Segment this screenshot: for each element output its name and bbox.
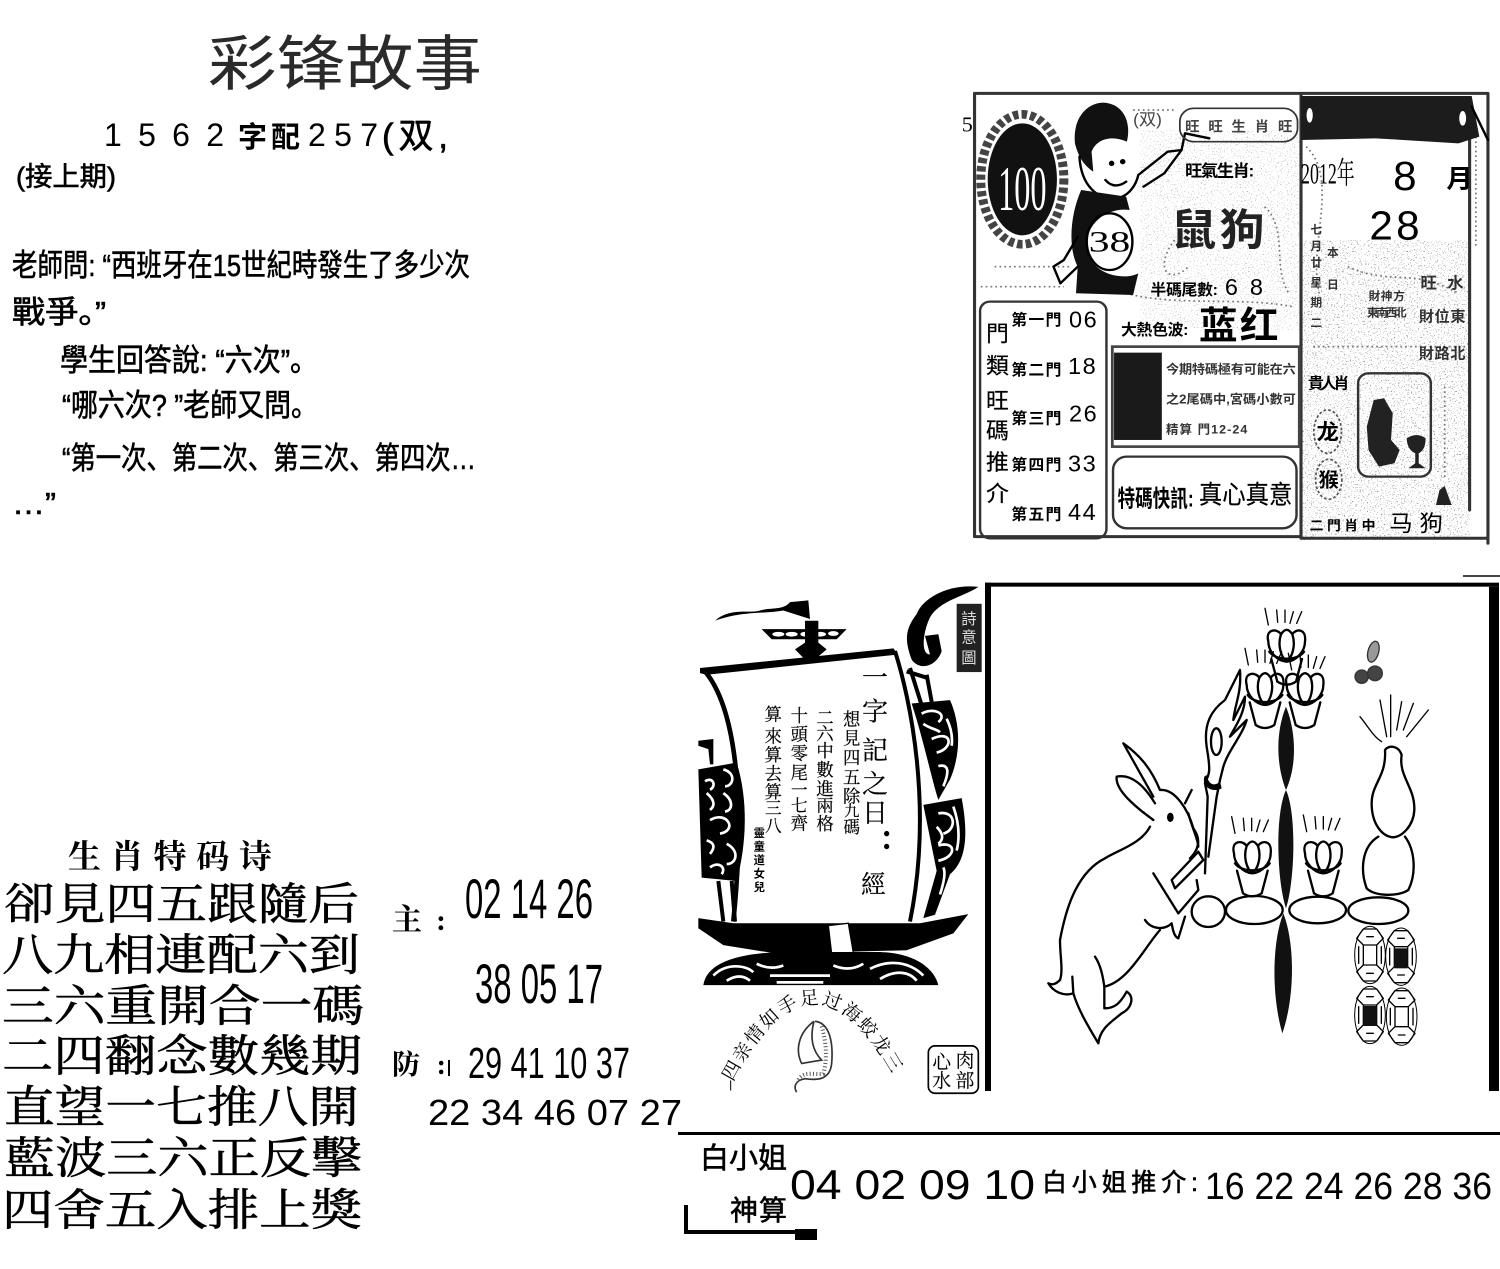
two doors zodiac bbox=[1310, 511, 1443, 537]
ship hull bbox=[698, 914, 968, 985]
bee bbox=[1355, 640, 1382, 683]
sail poem: 四 bbox=[843, 748, 860, 768]
noble people zodiac: 猴 bbox=[1319, 470, 1339, 492]
story text: …” bbox=[12, 486, 56, 521]
door numbers list: 門 bbox=[986, 322, 1009, 347]
door numbers list: 06 bbox=[1069, 307, 1097, 332]
calendar almanac notes: 期 bbox=[1310, 296, 1322, 310]
picture frame bbox=[985, 583, 1499, 1091]
story text: “哪六次? ”老師又問。 bbox=[62, 388, 318, 423]
calendar almanac notes: 財路北 bbox=[1419, 345, 1466, 362]
sail poem: 經 bbox=[861, 871, 886, 899]
footer: Miss Bai: 白小姐 bbox=[700, 1142, 787, 1175]
inner heart box: 水 bbox=[932, 1070, 951, 1092]
issue line: 1562 字配 257 bbox=[104, 117, 448, 156]
right banner ornaments bbox=[912, 700, 965, 918]
door numbers list: 第一門 bbox=[1011, 310, 1061, 329]
black notice box bbox=[1112, 347, 1299, 447]
colours blue red: 大熱色波: bbox=[1121, 320, 1188, 339]
issue line: 1562 字配 257: 257 bbox=[308, 117, 378, 153]
door numbers list: 18 bbox=[1068, 353, 1096, 379]
gourd bbox=[1360, 695, 1428, 895]
calendar almanac notes: 廿 bbox=[1310, 256, 1323, 270]
speckle: calendar column bbox=[1300, 240, 1470, 540]
black notice box: 精算 門12-24 bbox=[1166, 422, 1248, 436]
sail poem: 記 bbox=[862, 736, 888, 765]
story text: 戰爭。” bbox=[12, 295, 106, 330]
main numbers: 38 05 17 bbox=[475, 952, 603, 1015]
poem lines: 三六重開合一碼 bbox=[2, 982, 364, 1031]
special code hint: 特碼快訊: bbox=[1118, 486, 1194, 513]
door numbers list: 第四門 bbox=[1011, 455, 1061, 474]
calendar date bbox=[1301, 153, 1473, 248]
black notice box: 之2尾碼中,宮碼小數可 bbox=[1166, 392, 1296, 406]
calendar almanac notes: 旺水 bbox=[1420, 275, 1464, 292]
sail poem: 八 bbox=[765, 817, 782, 836]
top slogan speech bubble bbox=[1133, 108, 1298, 142]
main numbers: 主: bbox=[392, 904, 446, 937]
badge 100 bbox=[981, 114, 1064, 244]
poem tag: 詩 bbox=[961, 610, 977, 628]
footer recommendation bbox=[1042, 1166, 1492, 1208]
flower cups bbox=[1232, 608, 1342, 896]
main numbers bbox=[392, 867, 603, 1015]
door numbers list: 26 bbox=[1069, 401, 1097, 427]
noble people zodiac bbox=[1308, 375, 1349, 499]
noble people zodiac: 貴人肖 bbox=[1308, 375, 1349, 392]
door numbers list: 碼 bbox=[986, 419, 1009, 443]
inner heart box bbox=[928, 1046, 978, 1093]
speckle noise bbox=[981, 110, 1476, 480]
calendar almanac notes: 財位東 bbox=[1419, 308, 1466, 326]
sail poem: 格 bbox=[816, 814, 834, 834]
ship sail and mast bbox=[700, 600, 920, 922]
calendar almanac notes: 月 bbox=[1310, 240, 1322, 253]
story text: 學生回答說: “六次”。 bbox=[60, 343, 318, 378]
title: 彩锋故事 bbox=[208, 31, 482, 98]
sail poem: 六 bbox=[816, 724, 834, 744]
calendar almanac notes: 日 bbox=[1327, 279, 1339, 291]
special code hint: 真心真意 bbox=[1199, 481, 1292, 509]
snake medallion: 四亲情如手足过海蛟龙三六九 bbox=[720, 988, 903, 1081]
sail poem: 道 bbox=[754, 853, 766, 867]
poem lines: 藍波三六正反擊 bbox=[4, 1134, 362, 1183]
poem tag bbox=[957, 604, 982, 672]
sail poem: 進 bbox=[816, 779, 834, 799]
sail poem: 想 bbox=[843, 709, 861, 730]
two doors zodiac: 二門肖中 bbox=[1310, 517, 1375, 533]
door numbers list: 44 bbox=[1068, 499, 1096, 525]
top slogan speech bubble: 旺旺生肖旺 bbox=[1185, 119, 1292, 136]
top slogan speech bubble: (双) bbox=[1133, 110, 1162, 129]
rabbit bbox=[1048, 743, 1203, 1043]
four coins bbox=[1355, 926, 1417, 1045]
issue line: 1562 字配 257: 1562 bbox=[104, 117, 224, 153]
inner heart box: 部 bbox=[956, 1070, 975, 1092]
cartoon boy holding 38 ball: 38 bbox=[1089, 226, 1130, 259]
badge 100: 100 bbox=[998, 153, 1047, 224]
main numbers: 02 14 26 bbox=[465, 867, 593, 930]
poem lines: 直望一七推八開 bbox=[4, 1083, 359, 1132]
door numbers list: 類 bbox=[986, 354, 1009, 378]
calendar date: 28 bbox=[1369, 202, 1420, 248]
footer: Miss Bai: 神算 bbox=[730, 1195, 787, 1226]
poem tag: 圖 bbox=[961, 650, 977, 667]
sail poem: 五 bbox=[843, 767, 860, 787]
issue line: 1562 字配 257: 字配 bbox=[238, 121, 300, 154]
calendar almanac notes: 七 bbox=[1310, 224, 1323, 236]
sail poem: 去 bbox=[765, 764, 782, 784]
sail poem: 字 bbox=[862, 697, 888, 726]
snake medallion bbox=[720, 988, 903, 1092]
calendar almanac notes: 財神方 bbox=[1369, 289, 1405, 303]
sail poem: 靈 bbox=[754, 827, 765, 840]
tail numbers 68 bbox=[1150, 274, 1263, 300]
panel: lottery calendar clipping: 5 bbox=[962, 113, 973, 137]
calendar black banner bbox=[1301, 96, 1488, 143]
dragon figure at prow bbox=[907, 586, 978, 705]
thin rule top right bbox=[1463, 575, 1500, 577]
defence numbers: 防: bbox=[392, 1049, 446, 1081]
panel: ship poem bbox=[698, 586, 982, 1094]
colours blue red bbox=[1121, 306, 1279, 347]
black spindle stem bbox=[1274, 707, 1294, 1033]
special code hint bbox=[1113, 457, 1297, 528]
panel: zodiac poem bbox=[2, 839, 364, 1235]
panel: lottery calendar clipping bbox=[962, 93, 1488, 543]
sail poem: 女 bbox=[754, 867, 765, 881]
story text bbox=[12, 248, 476, 521]
base clouds bbox=[1192, 896, 1408, 927]
calendar date: 月 bbox=[1446, 166, 1473, 193]
door numbers list: 第三門 bbox=[1011, 409, 1061, 427]
sail poem: 七 bbox=[791, 797, 808, 816]
door numbers list: 第五門 bbox=[1011, 505, 1061, 523]
tail numbers 68: 半碼尾數: bbox=[1150, 281, 1218, 299]
sail poem: 二 bbox=[816, 708, 834, 728]
poem lines bbox=[2, 880, 364, 1235]
footer numbers: 04 02 09 10 bbox=[790, 1161, 1035, 1208]
colours blue red: 蓝红 bbox=[1199, 306, 1279, 347]
zodiac picks: 鼠狗 bbox=[1171, 207, 1265, 255]
issue line: 1562 字配 257: (双, bbox=[382, 117, 448, 156]
cartoon boy holding 38 ball bbox=[1053, 103, 1209, 295]
sail poem: 數 bbox=[816, 760, 834, 780]
sail poem: 算 bbox=[765, 745, 782, 765]
sail poem: 齊 bbox=[791, 813, 808, 834]
sail poem: 兒 bbox=[754, 880, 766, 894]
story text: 老師問: “西班牙在15世紀時發生了多少次 bbox=[12, 248, 470, 283]
defence numbers bbox=[392, 1039, 682, 1133]
door numbers list: 旺 bbox=[986, 389, 1009, 413]
door numbers list bbox=[980, 302, 1106, 538]
poem lines: 卻見四五跟隨后 bbox=[4, 880, 359, 929]
poem tag: 意 bbox=[961, 628, 977, 647]
sail poem: 日 bbox=[862, 799, 888, 828]
zodiac picks bbox=[1171, 162, 1265, 255]
speckle: clipping centre bbox=[1140, 130, 1300, 330]
calendar almanac notes: 東南西北 bbox=[1367, 306, 1407, 320]
door numbers list: 第二門 bbox=[1011, 360, 1061, 379]
hand holding branch bbox=[1204, 670, 1247, 873]
calendar almanac notes bbox=[1310, 224, 1466, 362]
sail poem: 一 bbox=[791, 781, 808, 800]
calendar date: 8 bbox=[1393, 153, 1417, 199]
zodiac picks: 旺氣生肖: bbox=[1185, 162, 1254, 181]
sail poem: 十 bbox=[791, 706, 808, 726]
sail poem: 除 bbox=[843, 786, 861, 807]
noble people zodiac: 龙 bbox=[1317, 420, 1339, 444]
black notice box: 今期特碼極有可能在六 bbox=[1166, 362, 1296, 376]
poem lines: 二四翻念數幾期 bbox=[2, 1032, 362, 1081]
footer recommendation: 白小姐推介: bbox=[1042, 1169, 1198, 1197]
sail poem: 算 bbox=[765, 704, 782, 724]
clipping frame bbox=[975, 93, 1488, 543]
two doors zodiac: 马狗 bbox=[1389, 511, 1443, 537]
sail poem bbox=[754, 663, 889, 899]
sail poem: 中 bbox=[816, 741, 834, 761]
calendar almanac notes: 本 bbox=[1327, 246, 1339, 260]
door numbers list: 推 bbox=[986, 450, 1009, 475]
continued note: (接上期) bbox=[16, 162, 116, 192]
door numbers list: 介 bbox=[986, 482, 1009, 507]
story text: “第一次、第二次、第三次、第四次… bbox=[62, 441, 476, 476]
poem lines: 四舍五入排上獎 bbox=[2, 1186, 362, 1235]
poem heading: 生肖特码诗 bbox=[68, 839, 272, 876]
door numbers list: 33 bbox=[1068, 451, 1096, 477]
sail poem: 尾 bbox=[791, 763, 808, 783]
calendar date: 2012年 bbox=[1301, 157, 1355, 190]
sail poem: 之 bbox=[862, 770, 888, 799]
sail poem: 一 bbox=[862, 663, 888, 693]
sail poem: 來 bbox=[765, 726, 782, 746]
sail poem: 零 bbox=[791, 743, 808, 763]
rule above footer bbox=[678, 1132, 1500, 1135]
sail poem: 三 bbox=[765, 799, 782, 818]
sail poem: 童 bbox=[754, 839, 765, 854]
sail poem: 見 bbox=[843, 729, 860, 749]
tail numbers 68: 68 bbox=[1225, 274, 1263, 300]
left banner ornaments bbox=[698, 739, 745, 922]
rooster and cup picture bbox=[1358, 373, 1452, 505]
defence numbers: 29 41 10 37 bbox=[468, 1039, 630, 1088]
panel: rabbit puzzle picture bbox=[985, 583, 1499, 1091]
sail poem: 算 bbox=[765, 782, 782, 802]
calendar almanac notes: 二 bbox=[1310, 318, 1322, 330]
defence numbers: 22 34 46 07 27 bbox=[428, 1092, 682, 1133]
sail poem: 頭 bbox=[791, 725, 809, 745]
poem lines: 八九相連配六到 bbox=[2, 931, 360, 980]
sail poem: 九 bbox=[844, 802, 860, 820]
inner heart box: 心 bbox=[932, 1051, 952, 1074]
footer: Miss Bai bbox=[686, 1142, 817, 1240]
sail poem: 兩 bbox=[817, 797, 833, 816]
inner heart box: 肉 bbox=[956, 1050, 974, 1072]
sail poem: 碼 bbox=[843, 818, 860, 837]
calendar almanac notes: 星 bbox=[1310, 277, 1322, 290]
